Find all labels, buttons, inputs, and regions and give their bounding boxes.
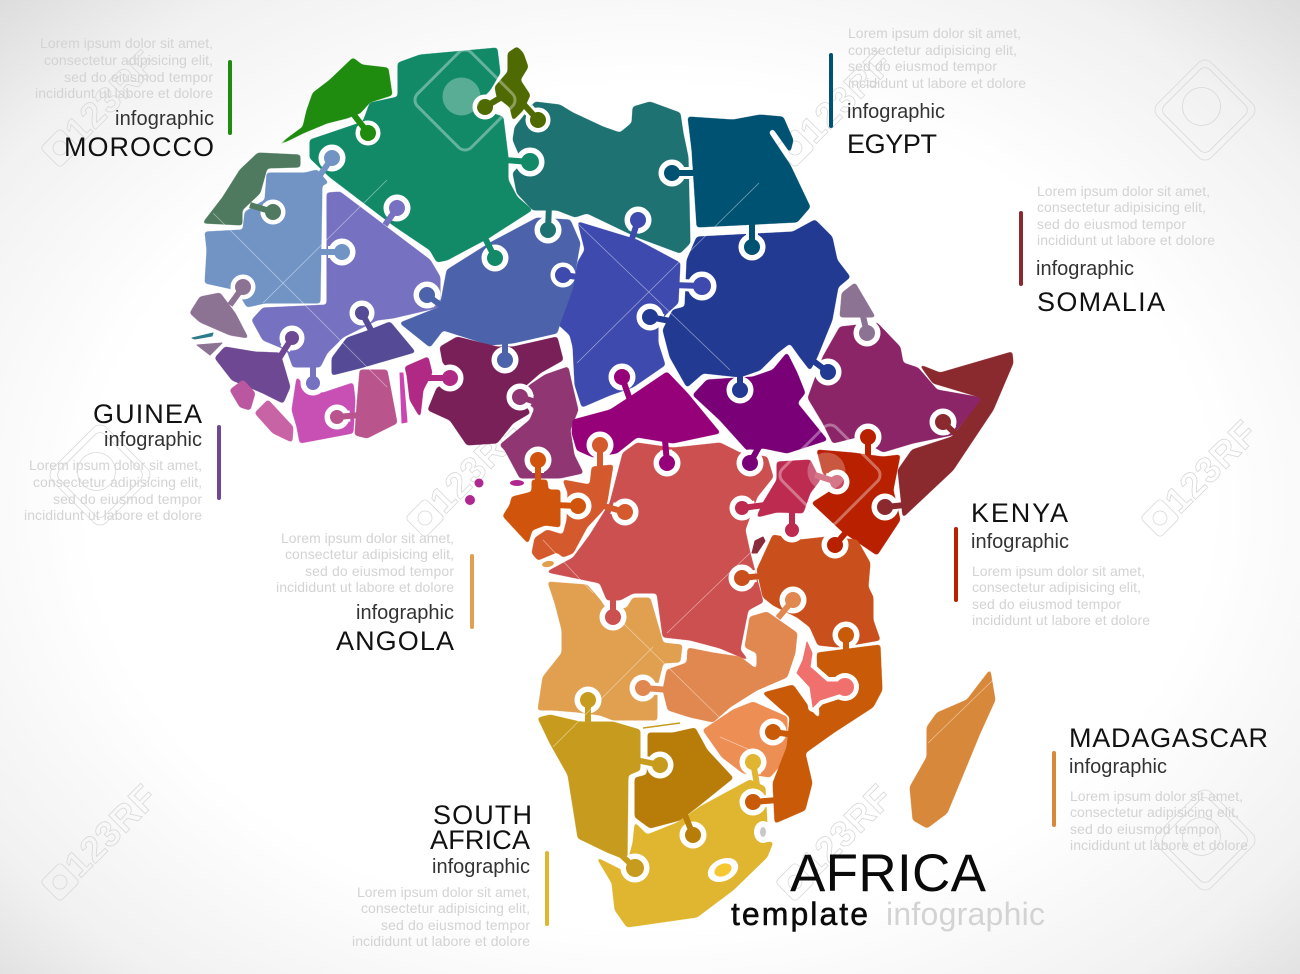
tab: Tunisia east: [518, 98, 550, 132]
country: Somalia: [898, 352, 1013, 517]
country: Guinea-Bissau: [197, 343, 222, 355]
country: Mali: [252, 192, 440, 367]
tab: Guinea: [278, 326, 304, 360]
tab: Uganda west: [730, 496, 765, 520]
label: Egypt: [829, 25, 1026, 159]
text: Morocco lorem: sed do eiusmod tempor: [64, 69, 213, 85]
heading: Kenya: KENYA: [971, 498, 1068, 528]
tab: Central African Republic north: [609, 364, 635, 400]
tab: Gabon east: [555, 493, 591, 519]
text: South Africa lorem: sed do eiusmod tempor: [381, 917, 530, 933]
text: infographic: infographic: [1036, 258, 1134, 280]
text: Kenya lorem: [972, 563, 1150, 628]
heading: Angola: ANGOLA: [336, 626, 454, 656]
text: Angola lorem: [276, 530, 454, 595]
text: Morocco lorem: [35, 35, 213, 101]
country: Namibia: [538, 715, 640, 860]
watermarks: 123RF: [56, 43, 165, 151]
tab: Mali north: [384, 195, 410, 225]
heading: South Africa: [430, 800, 532, 855]
small: Cabinda: [542, 560, 554, 568]
country: Uganda: [757, 460, 820, 517]
subtitle: infographic: infographic: [886, 896, 1045, 932]
tab: Botswana south: [680, 815, 706, 848]
text: Egypt lorem: sed do eiusmod tempor: [848, 58, 997, 74]
text: Kenya lorem: Lorem ipsum dolor sit amet,: [972, 563, 1145, 579]
title: AFRICA: AFRICA: [790, 844, 987, 903]
country: Nigeria: [428, 337, 563, 445]
text: Guinea lorem: [24, 457, 202, 523]
text: Angola lorem: incididunt ut labore et dolore: [276, 579, 454, 595]
heading: Madagascar: MADAGASCAR: [1069, 723, 1268, 753]
tab: Egypt south: [739, 222, 765, 260]
tab: Somalia south: [872, 494, 905, 520]
text: Somalia lorem: [1037, 183, 1215, 248]
subtitle: template: template: [731, 896, 868, 932]
country: Ethiopia: [808, 323, 983, 452]
tab: Tunisia west: [473, 95, 505, 119]
text: Guinea lorem: Lorem ipsum dolor sit amet,: [29, 457, 202, 473]
country: Guinea: [215, 347, 290, 403]
country: Sierra Leone: [230, 380, 255, 410]
tab: South Sudan south: [737, 445, 763, 476]
tab: DR Congo south: [600, 597, 626, 630]
text: Egypt lorem: [848, 25, 1026, 91]
text: infographic: infographic: [115, 108, 214, 130]
text: Madagascar lorem: incididunt ut labore et dolore: [1070, 837, 1248, 853]
text: Morocco lorem: consectetur adipisicing elit,: [44, 52, 213, 68]
watermarks: 123RF: [421, 413, 530, 521]
label: Madagascar: [1052, 723, 1268, 853]
text: Somalia lorem: consectetur adipisicing elit,: [1037, 199, 1206, 215]
tab: Ghana: [325, 405, 360, 429]
tab: Algeria east: [505, 148, 544, 176]
tab: Chad east: [672, 272, 716, 300]
country: Mozambique: [763, 645, 882, 823]
tab: Zambia west: [630, 675, 670, 701]
small: island: [465, 495, 475, 505]
text: Morocco lorem: Lorem ipsum dolor sit amet,: [40, 35, 213, 51]
text: Madagascar lorem: consectetur adipisicing elit,: [1070, 804, 1239, 820]
bar: [217, 425, 221, 500]
country: Chad: [557, 222, 680, 407]
text: infographic: infographic: [971, 531, 1069, 553]
country: Angola: [538, 582, 682, 720]
tab: Niger west: [414, 282, 447, 310]
Lesotho: [704, 853, 742, 887]
tab: Mauritania east: [318, 239, 355, 265]
tab: Algeria south: [482, 238, 508, 271]
country: Cote d'Ivoire: [292, 377, 355, 443]
country: DR Congo: [547, 443, 773, 660]
heading: Guinea: GUINEA: [93, 399, 202, 429]
tab: Niger south: [492, 338, 518, 373]
text: Guinea lorem: consectetur adipisicing elit,: [33, 474, 202, 490]
tab: Tanzania west: [729, 565, 770, 591]
heading: Morocco: MOROCCO: [64, 132, 214, 162]
tab: Western Sahara: [250, 200, 285, 224]
tab: Sudan west: [637, 304, 675, 330]
country: Malawi: [797, 642, 859, 707]
tab: Mauritania north: [318, 145, 345, 178]
country: Morocco: [277, 58, 392, 146]
small: island: [474, 478, 484, 488]
country: Gabon: [503, 480, 560, 543]
text: South Africa lorem: Lorem ipsum dolor sit amet,: [357, 884, 530, 900]
text: Kenya lorem: consectetur adipisicing elit,: [972, 579, 1141, 595]
tab: South Africa north: [740, 749, 766, 785]
watermarks: 123RF: [791, 777, 900, 885]
faint grid lines: [213, 180, 993, 750]
tab: Mali south: [301, 362, 325, 395]
country: Sudan: [663, 220, 850, 387]
small: Caprivi strip: [643, 723, 680, 728]
small: island: [510, 480, 524, 486]
tab: Chad north: [625, 207, 651, 245]
tab: Morocco: [354, 115, 380, 145]
tab: Namibia south: [618, 852, 649, 882]
text: Madagascar lorem: Lorem ipsum dolor sit amet,: [1070, 788, 1243, 804]
text: infographic: infographic: [847, 101, 945, 123]
text: Angola lorem: Lorem ipsum dolor sit amet,: [281, 530, 454, 546]
country: Tanzania: [757, 535, 880, 647]
text: Kenya lorem: sed do eiusmod tempor: [972, 596, 1121, 612]
tab: Namibia north: [575, 687, 601, 722]
watermark overlays on map: [411, 46, 884, 529]
tab: Zambia north: [778, 587, 806, 618]
country: Madagascar: [910, 670, 995, 828]
country: Libya: [513, 102, 690, 253]
text: Kenya lorem: incididunt ut labore et dolore: [972, 612, 1150, 628]
heading: South Africa: AFRICA: [430, 825, 530, 855]
country: Senegal: [190, 293, 248, 338]
tab: Eritrea: [854, 312, 880, 346]
tab: Benin: [425, 365, 463, 391]
tab: Congo north: [587, 432, 613, 475]
bar: [1019, 211, 1023, 286]
tab: CAR south: [654, 440, 680, 476]
tab: Libya south: [535, 205, 561, 243]
map of Africa: [190, 47, 1013, 927]
tab: Cameroon: [507, 384, 545, 410]
text: Guinea lorem: incididunt ut labore et dolore: [24, 507, 202, 523]
bar: [545, 851, 549, 926]
text: Madagascar lorem: sed do eiusmod tempor: [1070, 821, 1219, 837]
text: Egypt lorem: Lorem ipsum dolor sit amet,: [848, 25, 1021, 41]
country: Eritrea: [840, 283, 875, 317]
label: Somalia: [1019, 183, 1215, 317]
tab: Sudan south: [727, 370, 753, 403]
label: Morocco: [35, 35, 232, 162]
text: Somalia lorem: Lorem ipsum dolor sit amet,: [1037, 183, 1210, 199]
bar: [228, 60, 232, 135]
country: Central African Republic: [572, 372, 720, 457]
text: Morocco lorem: incididunt ut labore et dolore: [35, 85, 213, 101]
text: South Africa lorem: incididunt ut labore et dolore: [352, 933, 530, 949]
bar: [829, 53, 833, 128]
tab: Mozambique north: [833, 622, 859, 660]
tab: Kenya south: [822, 530, 848, 558]
text: South Africa lorem: [352, 884, 530, 949]
text: infographic: infographic: [104, 429, 202, 451]
text: South Africa lorem: consectetur adipisicing elit,: [361, 900, 530, 916]
text: Egypt lorem: incididunt ut labore et dolore: [848, 75, 1026, 91]
country: Western Sahara: [203, 153, 300, 225]
country: Botswana: [635, 728, 733, 828]
country: Niger: [400, 218, 580, 347]
tab: Somalia north: [930, 409, 962, 440]
tab: Gabon north: [525, 447, 551, 485]
Swaziland: [754, 821, 772, 843]
tab: Kenya north: [855, 424, 881, 460]
country: Gambia: [192, 333, 213, 339]
country: South Sudan: [693, 353, 827, 453]
country: South Africa: [597, 780, 773, 927]
heading: South Africa: SOUTH: [433, 800, 532, 830]
country: Tunisia: [495, 47, 530, 120]
country: Algeria: [310, 48, 532, 262]
country: Rwanda: [752, 537, 765, 553]
tab: Burkina Faso: [350, 301, 374, 332]
heading: Somalia: SOMALIA: [1037, 287, 1165, 317]
text: Angola lorem: sed do eiusmod tempor: [305, 563, 454, 579]
tab: Chad west: [551, 263, 585, 287]
country: Kenya: [812, 450, 900, 555]
tab: Senegal: [230, 275, 255, 305]
watermarks: 123RF: [791, 43, 900, 151]
text: Guinea lorem: sed do eiusmod tempor: [53, 491, 202, 507]
text: infographic: infographic: [432, 856, 530, 878]
label: South Africa: [352, 800, 549, 949]
country: Liberia: [255, 400, 293, 442]
text: Angola lorem: consectetur adipisicing elit,: [285, 546, 454, 562]
text: Egypt lorem: consectetur adipisicing elit,: [848, 42, 1017, 58]
bar: [954, 527, 958, 602]
text: Somalia lorem: sed do eiusmod tempor: [1037, 216, 1186, 232]
text: infographic: infographic: [1069, 756, 1167, 778]
bar: [1052, 751, 1056, 827]
tab: Sudan east: [812, 359, 841, 385]
country: Mauritania: [205, 170, 328, 307]
label: Kenya: [954, 498, 1150, 628]
label: Guinea: [24, 399, 221, 523]
tab: Mozambique south: [740, 789, 778, 815]
text: Madagascar lorem: [1070, 788, 1248, 853]
country: Egypt: [688, 115, 810, 227]
country: Zimbabwe: [703, 702, 787, 777]
tab: Uganda east: [815, 470, 849, 494]
heading: Egypt: EGYPT: [847, 129, 937, 159]
text: infographic: infographic: [356, 602, 454, 624]
country: Benin: [405, 357, 432, 417]
country: Togo: [400, 373, 407, 423]
watermarks: 123RF: [56, 777, 165, 885]
tab: Congo east: [600, 499, 638, 525]
bar: [470, 554, 474, 629]
country: Burkina Faso: [332, 322, 415, 375]
tab: Mozambique west: [760, 719, 795, 745]
tab: Uganda south: [780, 510, 804, 542]
label: Angola: [276, 530, 474, 656]
country: Ghana: [355, 370, 397, 438]
country: Republic of Congo: [532, 465, 613, 560]
tab: Egypt west: [659, 160, 696, 186]
country: Zambia: [663, 612, 797, 722]
text: Somalia lorem: incididunt ut labore et dolore: [1037, 232, 1215, 248]
country: Cameroon: [500, 367, 583, 478]
tab: Namibia east: [636, 752, 673, 778]
watermarks: 123RF: [1156, 413, 1265, 521]
